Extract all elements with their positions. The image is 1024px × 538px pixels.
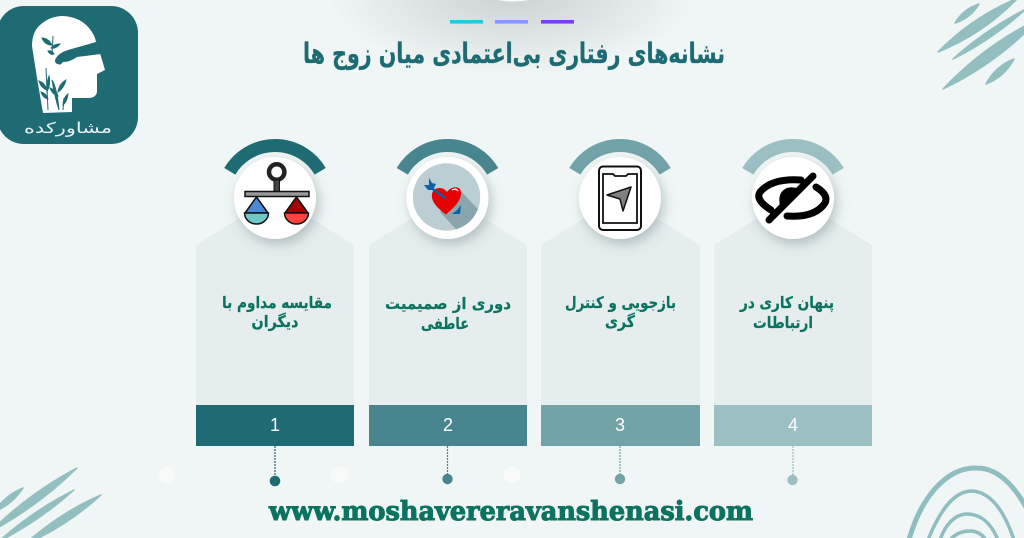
label 2 second line: عاطفی — [421, 314, 469, 333]
dot 4 — [787, 475, 798, 485]
number bar 3 — [541, 405, 700, 446]
panel body 1 — [196, 196, 354, 405]
website url: www.moshavereravanshenasi.com — [268, 497, 753, 527]
panel: 1 comparison — [196, 146, 354, 486]
panel: 2 emotional distance — [369, 146, 527, 484]
logo badge — [0, 6, 138, 144]
icon: phone with location arrow — [579, 157, 661, 239]
title: نشانه‌های رفتاری بی‌اعتمادی میان زوج ها — [303, 37, 725, 71]
number 3: 3 — [615, 415, 625, 435]
dot 2 — [442, 474, 453, 484]
decorative fingerprint arcs: bottom right — [909, 468, 1024, 538]
logo hand — [55, 42, 101, 65]
decorative white dots — [158, 466, 520, 484]
logo plants — [39, 36, 68, 110]
dot 3 — [615, 474, 625, 484]
number 4: 4 — [788, 415, 798, 435]
label 3 second line: گری — [605, 312, 636, 331]
number bar 2 — [369, 405, 527, 446]
icon: heart with arrow — [406, 157, 490, 240]
top glow — [327, 0, 697, 76]
connector 4 — [792, 446, 794, 475]
icon: crossed eye — [752, 157, 834, 239]
panel body 4 — [714, 196, 872, 405]
panel body 3 — [541, 196, 700, 405]
number bar 4 — [714, 405, 872, 446]
arc 4 — [748, 146, 838, 171]
decorative brush strokes: top right — [938, 0, 1024, 89]
panel: 3 checking and control — [541, 146, 700, 484]
number 1: 1 — [270, 415, 280, 435]
number 2: 2 — [443, 415, 453, 435]
label 4: پنهان کاری در — [739, 293, 834, 313]
icon: scale — [234, 157, 316, 239]
panel: 4 hiding in relationships — [714, 146, 872, 485]
accent bars — [450, 20, 574, 24]
connector 1 — [274, 446, 276, 476]
panel body 2 — [369, 196, 527, 405]
logo head silhouette — [32, 16, 105, 113]
label 4 second line: ارتباطات — [753, 313, 813, 332]
logo text: مشاورکده — [24, 119, 112, 137]
connector 2 — [446, 446, 448, 474]
decorative brush strokes: bottom left — [0, 468, 101, 538]
arc 3 — [575, 146, 665, 171]
number bar 1 — [196, 405, 354, 446]
label 3: بازجویی و کنترل — [565, 293, 676, 312]
arc 1 — [230, 146, 320, 171]
label 1 second line: دیگران — [252, 312, 298, 331]
arc 2 — [402, 146, 493, 171]
connector 3 — [619, 446, 621, 474]
dot 1 — [270, 476, 280, 486]
label 1: مقایسه مداوم با — [222, 293, 332, 312]
label 2: دوری از صمیمیت — [385, 294, 511, 313]
